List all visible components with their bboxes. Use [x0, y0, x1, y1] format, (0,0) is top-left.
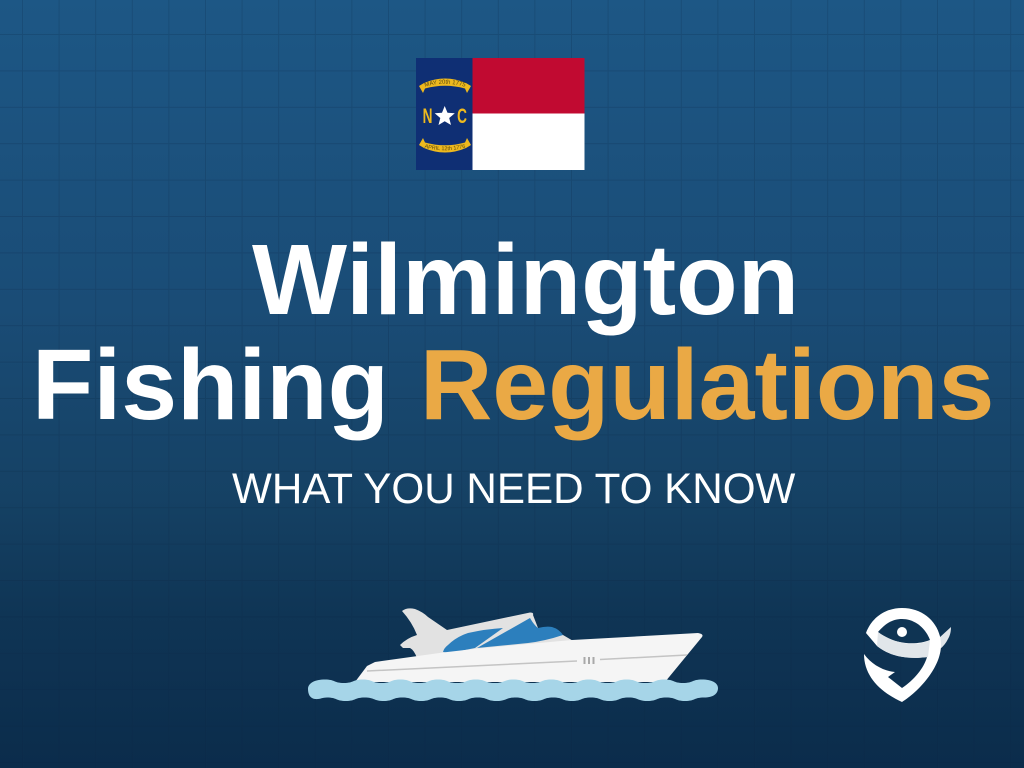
- boat windows: [477, 618, 563, 648]
- logo tail: [939, 627, 951, 649]
- icon: North Carolina flag: APRIL 12th 1776: [424, 144, 466, 150]
- hull stripe: [367, 655, 687, 671]
- icon: boat on water: [308, 608, 718, 701]
- title: Wilmington: [252, 224, 799, 336]
- logo band: [877, 632, 930, 658]
- icon: North Carolina flag: C: [457, 104, 467, 128]
- boat hull: [355, 633, 702, 682]
- boat cabin: [400, 608, 575, 660]
- logo body: [864, 608, 941, 702]
- icon: North Carolina flag: N: [423, 104, 432, 128]
- title: Fishing Regulations: [32, 329, 994, 441]
- logo eye area: [878, 619, 930, 643]
- title: [32, 224, 994, 441]
- water: [308, 680, 718, 701]
- icon: North Carolina flag: [416, 58, 584, 170]
- subtitle: WHAT YOU NEED TO KNOW: [232, 465, 796, 512]
- logo eye: [897, 627, 907, 637]
- icon: fish logo: [864, 608, 951, 702]
- icon: North Carolina flag: MAY 20th 1775: [424, 79, 466, 87]
